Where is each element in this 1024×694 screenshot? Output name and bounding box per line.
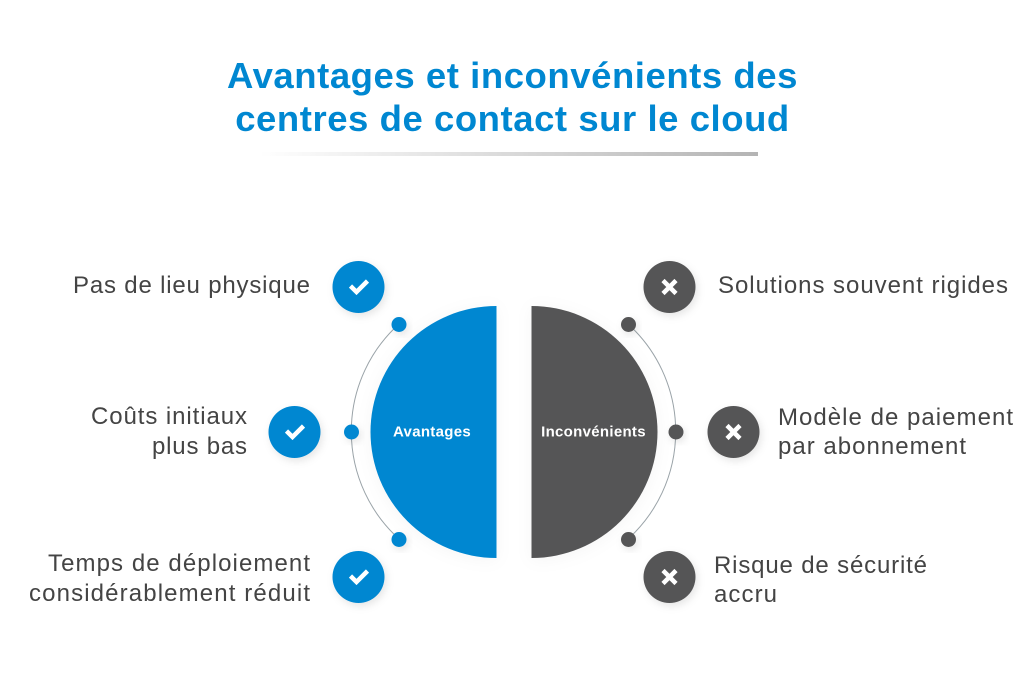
- label: modèle de paiement: Modèle de paiement: [778, 404, 1013, 431]
- icon: cross 1: [644, 261, 696, 313]
- connector arc: inconvénients: [621, 317, 684, 547]
- label: modèle de paiement: par abonnement: [778, 433, 966, 460]
- label: coûts initiaux: [91, 403, 247, 460]
- icon: check 2: [268, 406, 320, 458]
- panel: inconvénients half circle: [532, 306, 658, 558]
- icon: check 1: [332, 261, 384, 313]
- panel: avantages half circle: [371, 306, 496, 558]
- label: pas de lieu physique: Pas de lieu physique: [73, 272, 310, 299]
- icon: check 3: [332, 551, 384, 603]
- label: risque de sécurité: accru: [714, 581, 777, 608]
- label: modèle de paiement: [778, 404, 1013, 460]
- connector arc: avantages: [344, 317, 406, 547]
- label: coûts initiaux: plus bas: [152, 433, 247, 460]
- label: temps de déploiement: Temps de déploiement: [48, 550, 310, 577]
- label: temps de déploiement: [29, 550, 310, 607]
- label: risque de sécurité: Risque de sécurité: [714, 552, 927, 579]
- title: [227, 55, 798, 139]
- label: temps de déploiement: considérablement réduit: [29, 580, 310, 607]
- panel: inconvénients half circle: Inconvénients: [541, 424, 646, 440]
- title: centres de contact sur le cloud: [235, 98, 790, 139]
- icon: cross 3: [644, 551, 696, 603]
- title: Avantages et inconvénients des: [227, 55, 798, 96]
- label: coûts initiaux: Coûts initiaux: [91, 403, 247, 430]
- icon: cross 2: [708, 406, 760, 458]
- label: risque de sécurité: [714, 552, 927, 608]
- title underline: [260, 152, 758, 156]
- label: solutions rigides: Solutions souvent rigides: [718, 272, 1008, 299]
- panel: avantages half circle: Avantages: [393, 424, 471, 440]
